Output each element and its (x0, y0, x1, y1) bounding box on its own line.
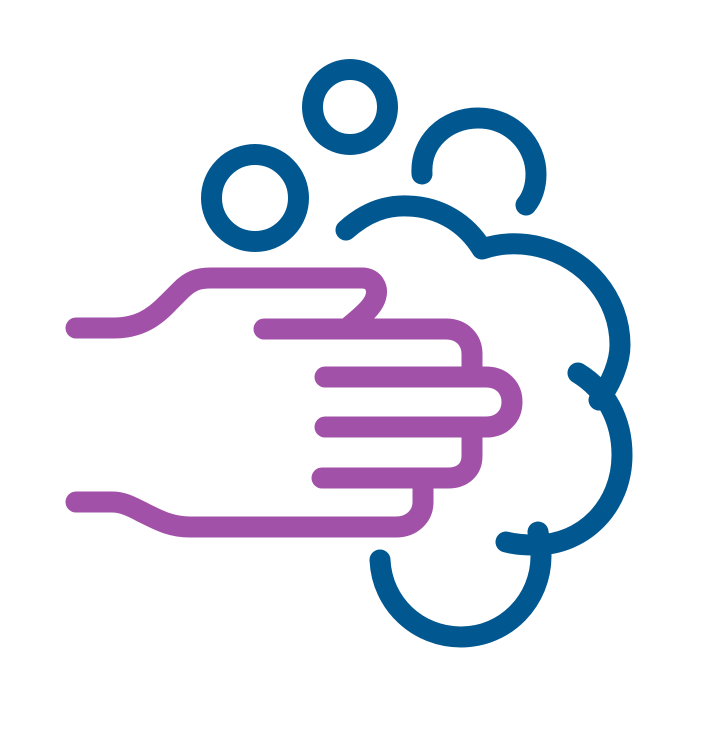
icon: soap bubbles and foam (212, 70, 622, 637)
hand: lower outline (76, 480, 423, 527)
icon: hands (76, 278, 512, 527)
bubble: open right (422, 118, 536, 205)
foam: bottom cloud (380, 532, 541, 637)
bubble: left (212, 154, 298, 242)
foam: upper cloud (346, 206, 620, 400)
hand: ring finger (322, 427, 472, 478)
hand: middle finger (325, 377, 512, 427)
foam: right cloud (506, 373, 622, 545)
hand: upper outline with thumb (76, 278, 376, 328)
hand: index finger (264, 329, 472, 376)
bubble: top (312, 70, 388, 144)
